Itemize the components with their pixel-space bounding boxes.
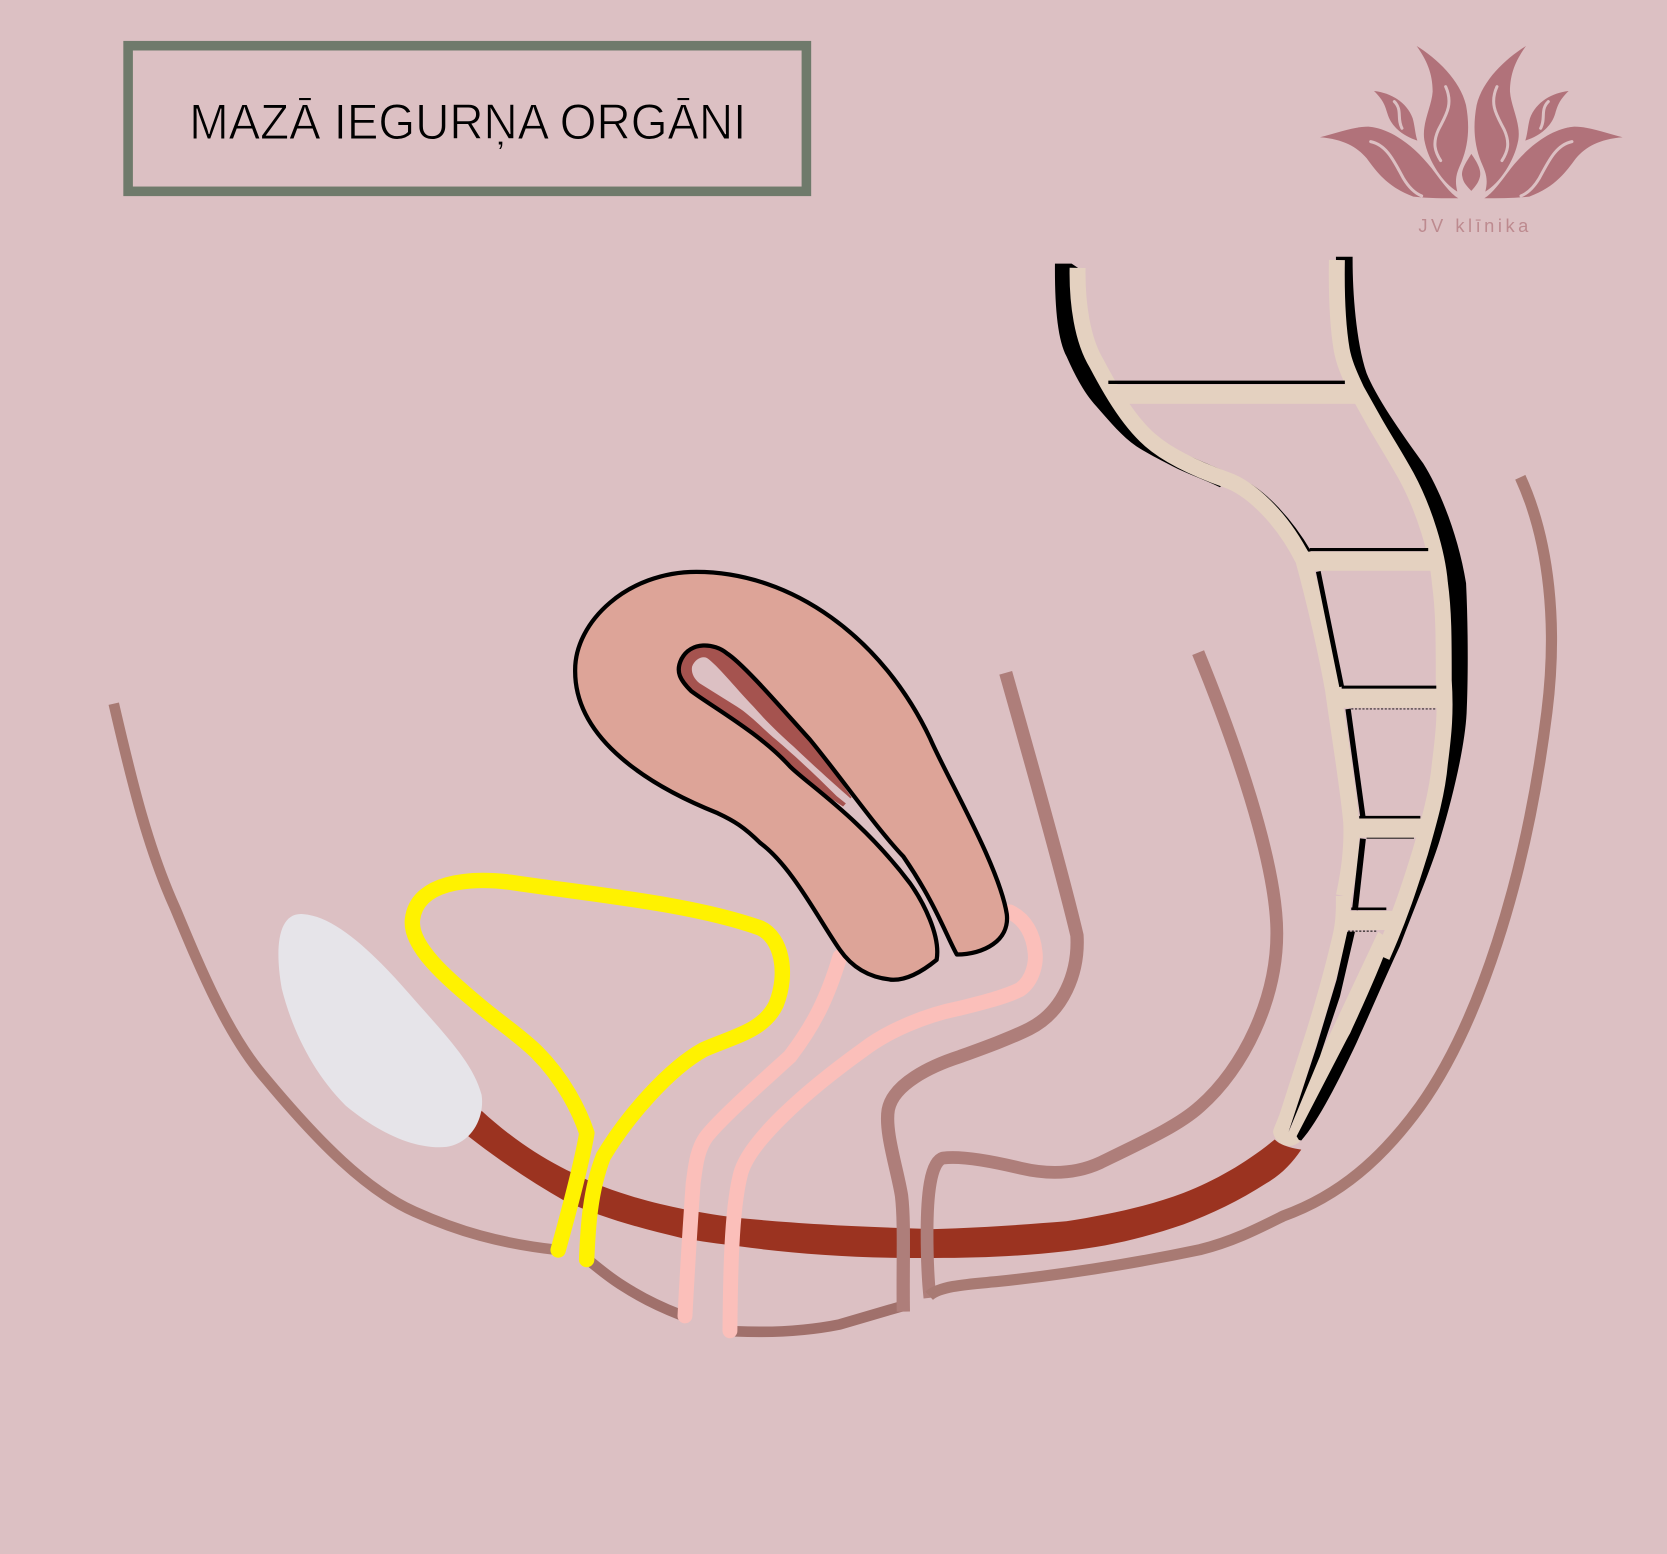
sacrum back shadow bbox=[1289, 257, 1468, 1141]
posterior vaginal wall outline bbox=[888, 673, 1077, 1312]
coccyx bbox=[1273, 896, 1390, 1146]
icon: lotus flower bbox=[1320, 46, 1623, 198]
cavity lumen bbox=[692, 657, 852, 805]
perineal segment bbox=[590, 1261, 680, 1315]
back body outline bbox=[929, 477, 1551, 1296]
upper front shadow bbox=[1180, 453, 1310, 552]
sacrum and coccyx bbox=[1055, 257, 1468, 1146]
pubic bone bbox=[278, 914, 482, 1147]
sacral segment shadows bbox=[1108, 382, 1436, 931]
perineum floor segment bbox=[736, 1306, 902, 1332]
vagina bbox=[685, 912, 1035, 1331]
logo: lotus with clinic name bbox=[1320, 46, 1623, 236]
rectum outer wall bbox=[927, 653, 1277, 1298]
front abdominal wall bbox=[114, 704, 558, 1250]
title: MAZĀ IEGURŅA ORGĀNI bbox=[189, 94, 746, 150]
bladder and urethra bbox=[412, 880, 782, 1260]
uterus body bbox=[575, 572, 1007, 980]
rectum and anal canal bbox=[468, 1111, 1301, 1258]
sacrum front shadow bbox=[1055, 264, 1227, 487]
sacrum back band bbox=[1337, 260, 1445, 957]
coccyx inner shadow bbox=[1289, 932, 1355, 1132]
uterus bbox=[575, 572, 1007, 980]
pelvic floor and body outline walls bbox=[114, 477, 1551, 1332]
uterine cavity lining bbox=[679, 645, 852, 807]
uterus outline bbox=[575, 572, 1007, 980]
sacral segment ridges bbox=[1114, 394, 1443, 920]
logo text: JV klīnika bbox=[1418, 215, 1529, 236]
sacrum body bbox=[1078, 268, 1351, 896]
title box bbox=[128, 46, 806, 191]
